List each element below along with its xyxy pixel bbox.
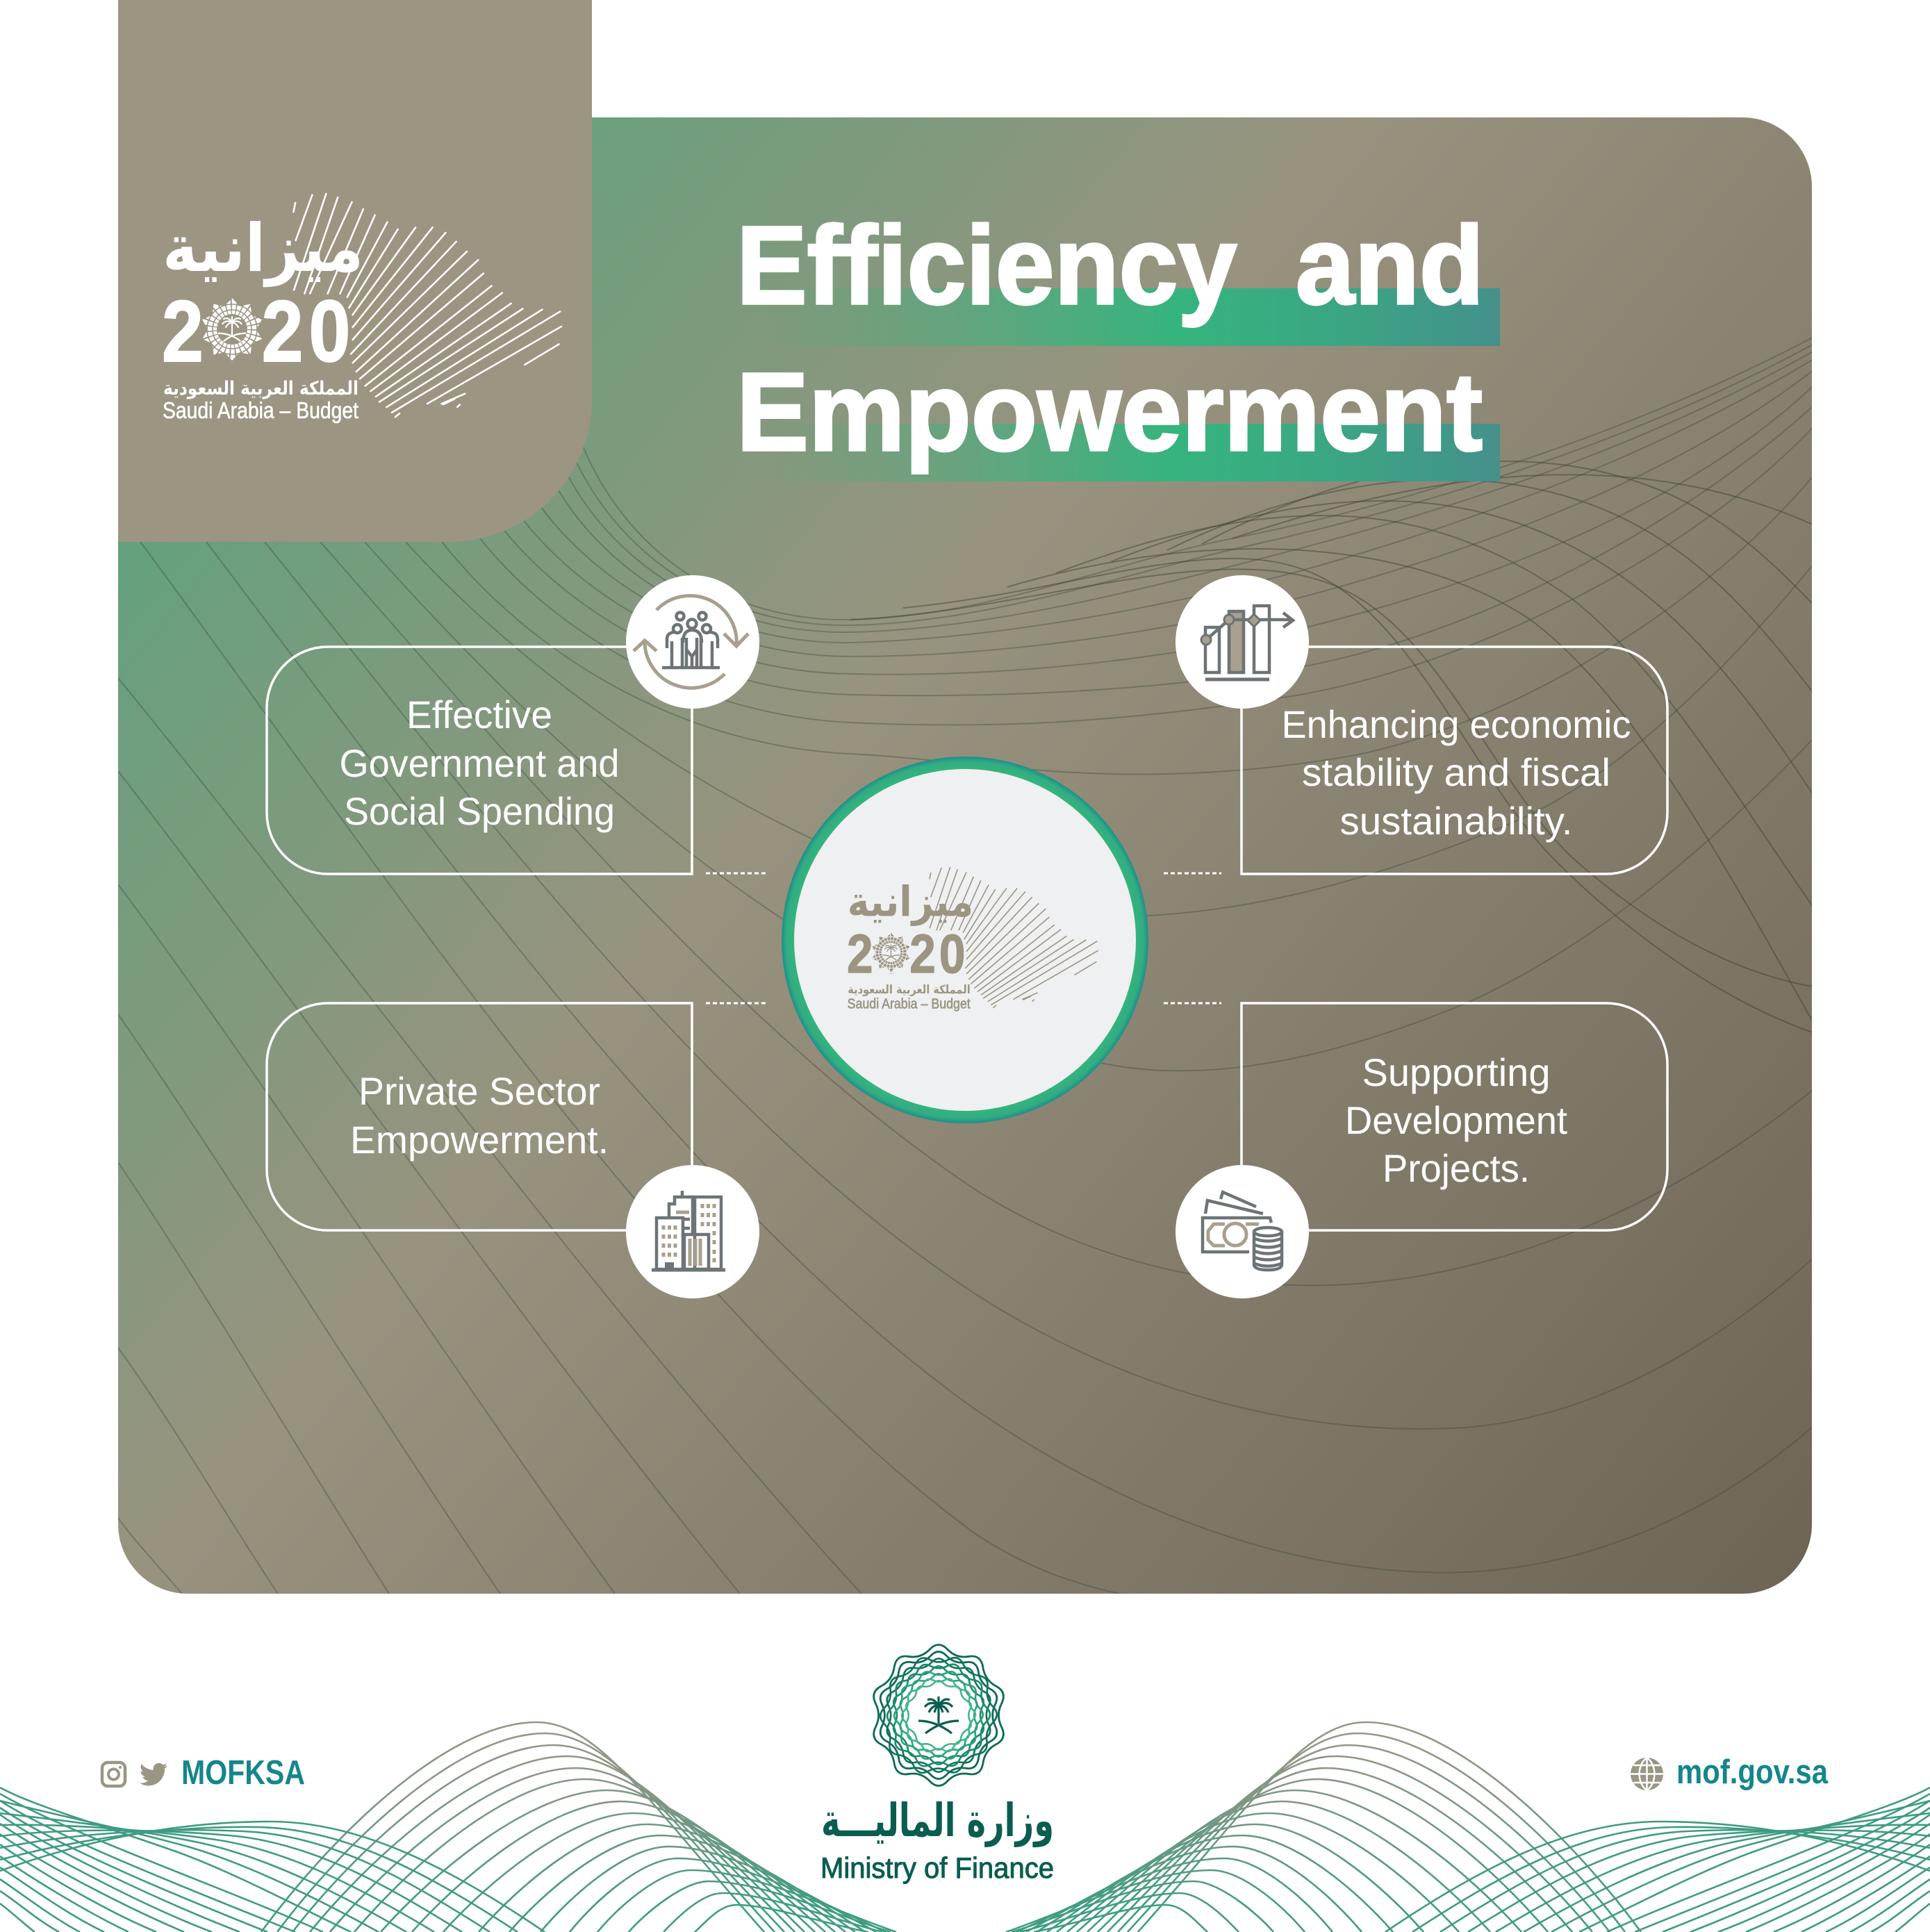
panel: Supporting Development Projects: Projects. <box>1383 1146 1530 1190</box>
centre badge <box>782 757 1148 1123</box>
footer wave pattern: right <box>1006 1722 1930 1932</box>
icon: banknotes and coins <box>1176 1165 1309 1298</box>
panel: Enhancing economic stability and fiscal sustainability <box>1242 647 1667 874</box>
centre logo: ميزانية <box>848 878 973 926</box>
logo: Saudi Arabia Budget 2020 (white): ميزانية <box>163 210 363 287</box>
icon: instagram <box>102 1762 125 1786</box>
panel: Effective Government and Social Spending: Government and <box>339 741 620 785</box>
centre logo: Saudi Arabia – Budget <box>848 996 971 1012</box>
panel: Supporting Development Projects <box>1242 1003 1667 1230</box>
title: Efficiency and <box>736 203 1484 327</box>
icon: palm and swords <box>918 1696 959 1733</box>
centre logo: 2020 <box>847 923 965 984</box>
icon: twitter <box>140 1763 167 1785</box>
icon: city buildings <box>626 1165 759 1298</box>
panel: Effective Government and Social Spending: Effective <box>406 693 552 736</box>
title highlight bars <box>764 288 1500 481</box>
panel: gradient background <box>118 117 1820 1598</box>
panel: Enhancing economic stability and fiscal sustainability: Enhancing economic <box>1281 702 1631 746</box>
title <box>736 203 1484 474</box>
logo: Saudi Arabia Budget 2020 (white) <box>162 193 562 423</box>
panel: Effective Government and Social Spending: Social Spending <box>344 789 615 833</box>
Ministry of Finance emblem <box>867 1641 1010 1790</box>
website: mof.gov.sa <box>1676 1753 1829 1791</box>
icon: bar chart with arrow <box>1176 575 1309 709</box>
social handle <box>102 1754 305 1792</box>
title: Empowerment <box>736 349 1483 474</box>
panel: Private Sector Empowerment: Empowerment. <box>350 1118 609 1162</box>
icon: people with cycle arrows <box>626 575 759 709</box>
logo: Saudi Arabia Budget 2020 (white): 2020 <box>162 282 350 380</box>
centre logo <box>847 867 1098 1012</box>
dotted connectors <box>706 873 1221 1003</box>
panel: Effective Government and Social Spending <box>267 647 692 874</box>
panel: Supporting Development Projects: Development <box>1345 1098 1567 1142</box>
Ministry of Finance wordmark <box>820 1794 1054 1884</box>
panel: Enhancing economic stability and fiscal sustainability: sustainability. <box>1339 799 1573 843</box>
logo: Saudi Arabia Budget 2020 (white): Saudi Arabia – Budget <box>163 397 358 423</box>
centre logo: المملكة العربية السعودية <box>848 982 971 997</box>
panel: Private Sector Empowerment: Private Sector <box>358 1069 600 1113</box>
panel: Supporting Development Projects: Supporting <box>1362 1050 1551 1094</box>
logo: Saudi Arabia Budget 2020 (white): المملكة العربية السعودية <box>163 378 358 399</box>
social handle: MOFKSA <box>181 1754 305 1792</box>
Ministry of Finance wordmark: Ministry of Finance <box>820 1851 1054 1884</box>
website <box>1631 1753 1829 1791</box>
footer wave pattern: left <box>0 1722 896 1932</box>
Ministry of Finance wordmark: وزارة الماليـــة <box>821 1794 1054 1848</box>
icon: globe <box>1631 1758 1663 1790</box>
logo tab <box>118 0 592 542</box>
panel: Private Sector Empowerment <box>267 1003 692 1230</box>
panel: Enhancing economic stability and fiscal sustainability: stability and fiscal <box>1302 750 1610 794</box>
